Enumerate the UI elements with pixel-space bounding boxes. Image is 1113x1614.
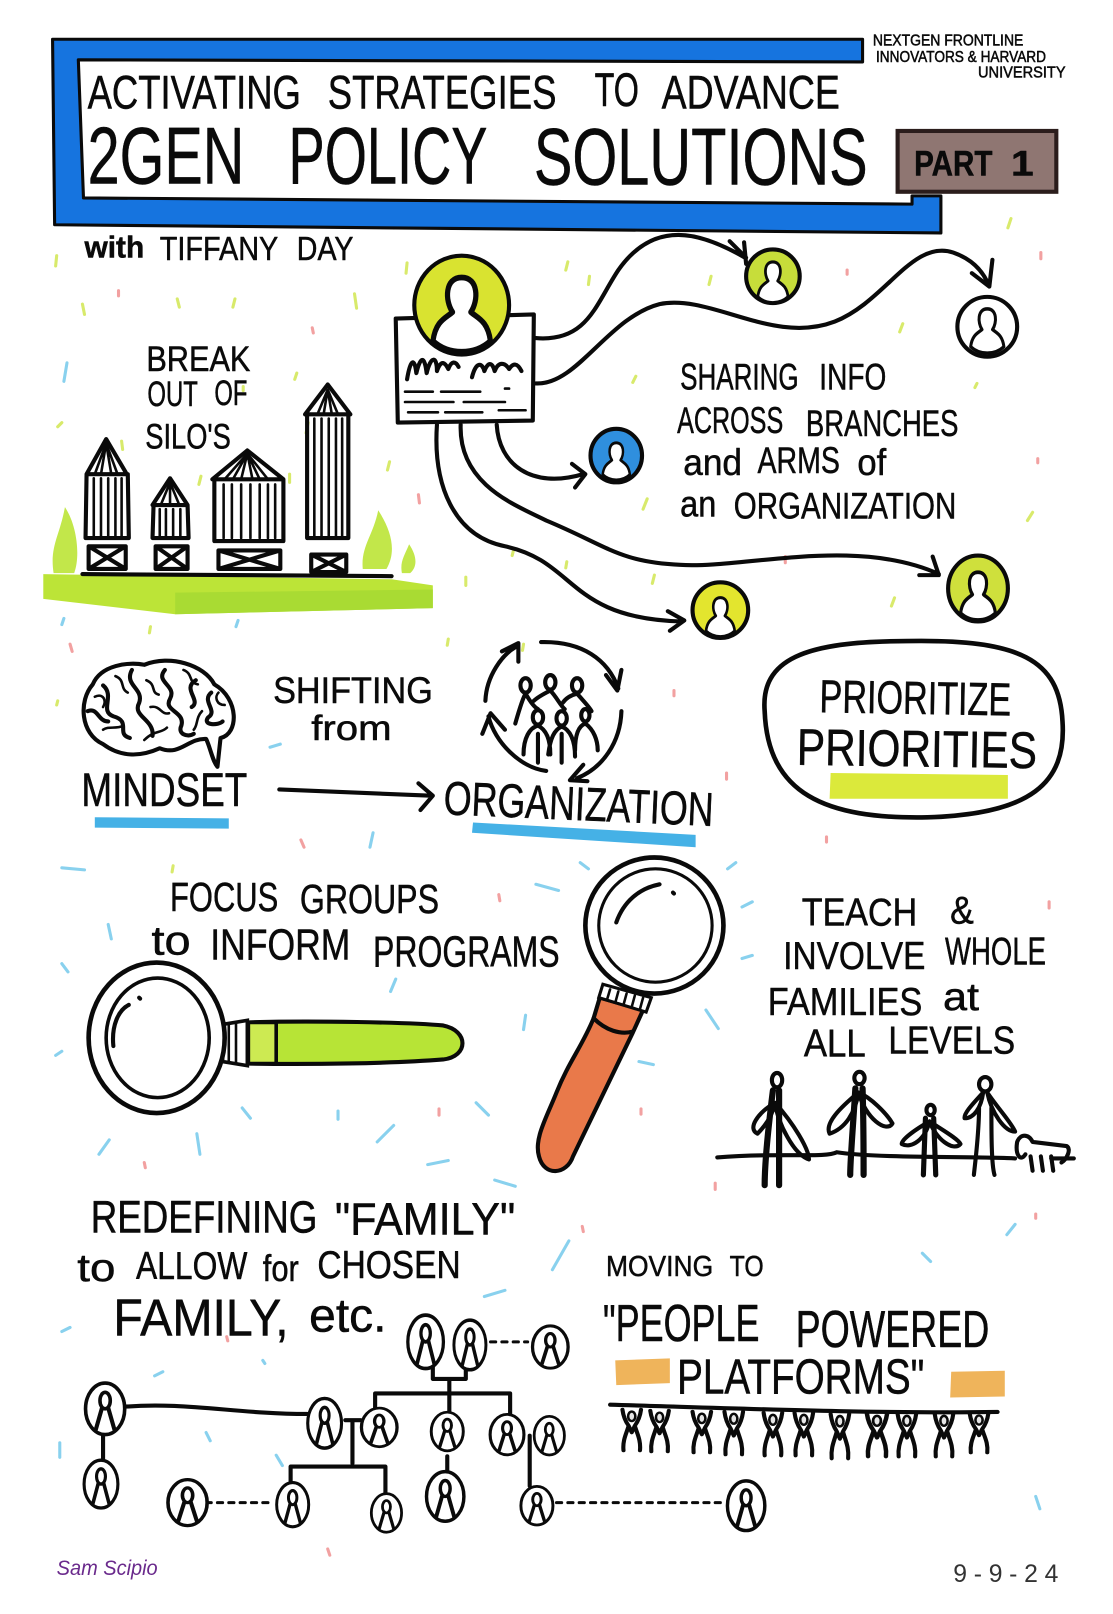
tree lines (103, 1342, 721, 1503)
title line 2: POLICY (289, 112, 487, 202)
recipient bottom right (948, 556, 1008, 622)
shifting from: SHIFTING (273, 669, 433, 711)
header banner (53, 39, 941, 233)
part 1 badge (898, 131, 1056, 192)
icon: people in cycle (482, 642, 621, 781)
recipient blue (591, 429, 642, 482)
part 1 badge: PART (914, 144, 993, 183)
silo 4 (305, 384, 350, 572)
focus groups text: PROGRAMS (373, 929, 560, 977)
mindset label: MINDSET (81, 764, 247, 817)
organisers credit: INNOVATORS & HARVARD (876, 49, 1046, 66)
sharing info text: an (680, 482, 716, 524)
people powered platforms (603, 1251, 1005, 1458)
background confetti (56, 219, 1049, 1555)
family tree (84, 1315, 765, 1532)
orange highlights (615, 1358, 1005, 1398)
family nodes (84, 1315, 765, 1532)
arrow: mindset to organization (279, 783, 433, 810)
teach and involve text: FAMILIES (768, 981, 922, 1024)
platform line (610, 1405, 998, 1412)
people powered line (603, 1294, 989, 1358)
signature: Sam Scipio (57, 1555, 158, 1580)
recipient bottom (693, 582, 748, 638)
silo 1 (86, 439, 129, 569)
sharing info text: BRANCHES (806, 402, 958, 444)
ground line (82, 574, 392, 576)
underline (95, 817, 229, 829)
title line 1: TO (595, 64, 639, 117)
redefining family text: "FAMILY" (335, 1194, 515, 1245)
sharing info text: of (857, 441, 887, 483)
silos heading: OUT (147, 375, 198, 414)
people powered line: POWERED (796, 1300, 989, 1358)
silos heading: SILO'S (145, 417, 231, 456)
redefining family text (77, 1192, 515, 1347)
prioritize callout: PRIORITIES (796, 718, 1037, 779)
teach and involve text: & (950, 889, 974, 932)
moving to: MOVING (606, 1251, 713, 1283)
underline (472, 822, 696, 847)
recipient top (746, 249, 800, 303)
prioritize callout: PRIORITIZE (819, 670, 1012, 726)
redefining family text: FAMILY, (113, 1289, 289, 1347)
redefining family text: etc. (309, 1290, 386, 1343)
sharing info text: INFO (819, 356, 886, 398)
title line 2: 2GEN (88, 112, 244, 202)
organisers credit: NEXTGEN FRONTLINE (873, 32, 1023, 49)
silos heading: OF (214, 374, 247, 413)
redefining family text: to (77, 1247, 115, 1290)
plants (53, 507, 415, 573)
silos heading: BREAK (146, 340, 250, 379)
focus groups text: to (151, 917, 191, 963)
teach and involve text: at (943, 976, 979, 1019)
redefining family text: for (263, 1247, 299, 1289)
recipient right (957, 297, 1017, 357)
organization label: ORGANIZATION (443, 772, 715, 837)
orange magnifying glass (538, 857, 723, 1171)
focus groups text: INFORM (210, 922, 350, 970)
platforms line: PLATFORMS" (677, 1349, 924, 1404)
sharing info text: and (683, 441, 742, 483)
icon: brain (84, 661, 234, 767)
presenter: TIFFANY (160, 230, 278, 267)
title line 1: STRATEGIES (328, 66, 556, 119)
green ground (43, 574, 433, 614)
teach and involve text: WHOLE (945, 931, 1046, 974)
teach and involve text: TEACH (802, 892, 917, 935)
presenter: DAY (297, 230, 353, 267)
redefining family text: ALLOW (136, 1245, 247, 1288)
date: 9-9-24 (953, 1561, 1059, 1588)
sharing info text: SHARING (680, 356, 799, 398)
shifting from (273, 669, 433, 748)
green magnifying glass (89, 963, 462, 1113)
presenter: with (84, 230, 144, 265)
moving to: TO (730, 1251, 764, 1283)
title line 1 (88, 64, 840, 119)
silo 2 (153, 478, 189, 569)
title line 1: ADVANCE (662, 66, 840, 119)
silos section (43, 340, 433, 614)
organization (443, 642, 715, 847)
prioritize callout (764, 641, 1063, 817)
connecting arrows (436, 235, 992, 631)
teach and involve text: INVOLVE (783, 935, 925, 978)
title line 2: SOLUTIONS (534, 113, 868, 203)
sharing info text: ARMS (757, 439, 840, 481)
sharing info text (677, 356, 958, 526)
silo 3 (212, 450, 283, 569)
sharing info text: ACROSS (677, 399, 783, 441)
shifting from: from (311, 709, 392, 748)
teach and involve text (768, 889, 1046, 1065)
presenter (84, 230, 353, 267)
hanging people (622, 1410, 988, 1458)
title line 1: ACTIVATING (88, 66, 301, 119)
sharing info text: ORGANIZATION (734, 484, 956, 526)
redefining family text: CHOSEN (317, 1244, 461, 1287)
mindset (81, 661, 247, 829)
organisers credit: UNIVERSITY (978, 64, 1066, 81)
blue frame (53, 39, 941, 233)
title line 2 (88, 112, 868, 203)
teach and involve text: ALL (804, 1022, 866, 1065)
silos heading (145, 340, 250, 456)
redefining family text: REDEFINING (91, 1192, 317, 1243)
focus groups text: GROUPS (300, 876, 439, 922)
focus groups text (151, 874, 560, 977)
people powered line: "PEOPLE (603, 1294, 760, 1352)
teach and involve text: LEVELS (888, 1019, 1015, 1062)
focus groups text: FOCUS (170, 874, 278, 920)
source card with person (396, 256, 534, 423)
organisers credit (873, 32, 1066, 81)
information sharing network (396, 235, 1017, 638)
part 1 badge: 1 (1011, 144, 1034, 183)
family figures with dog (717, 1072, 1074, 1185)
